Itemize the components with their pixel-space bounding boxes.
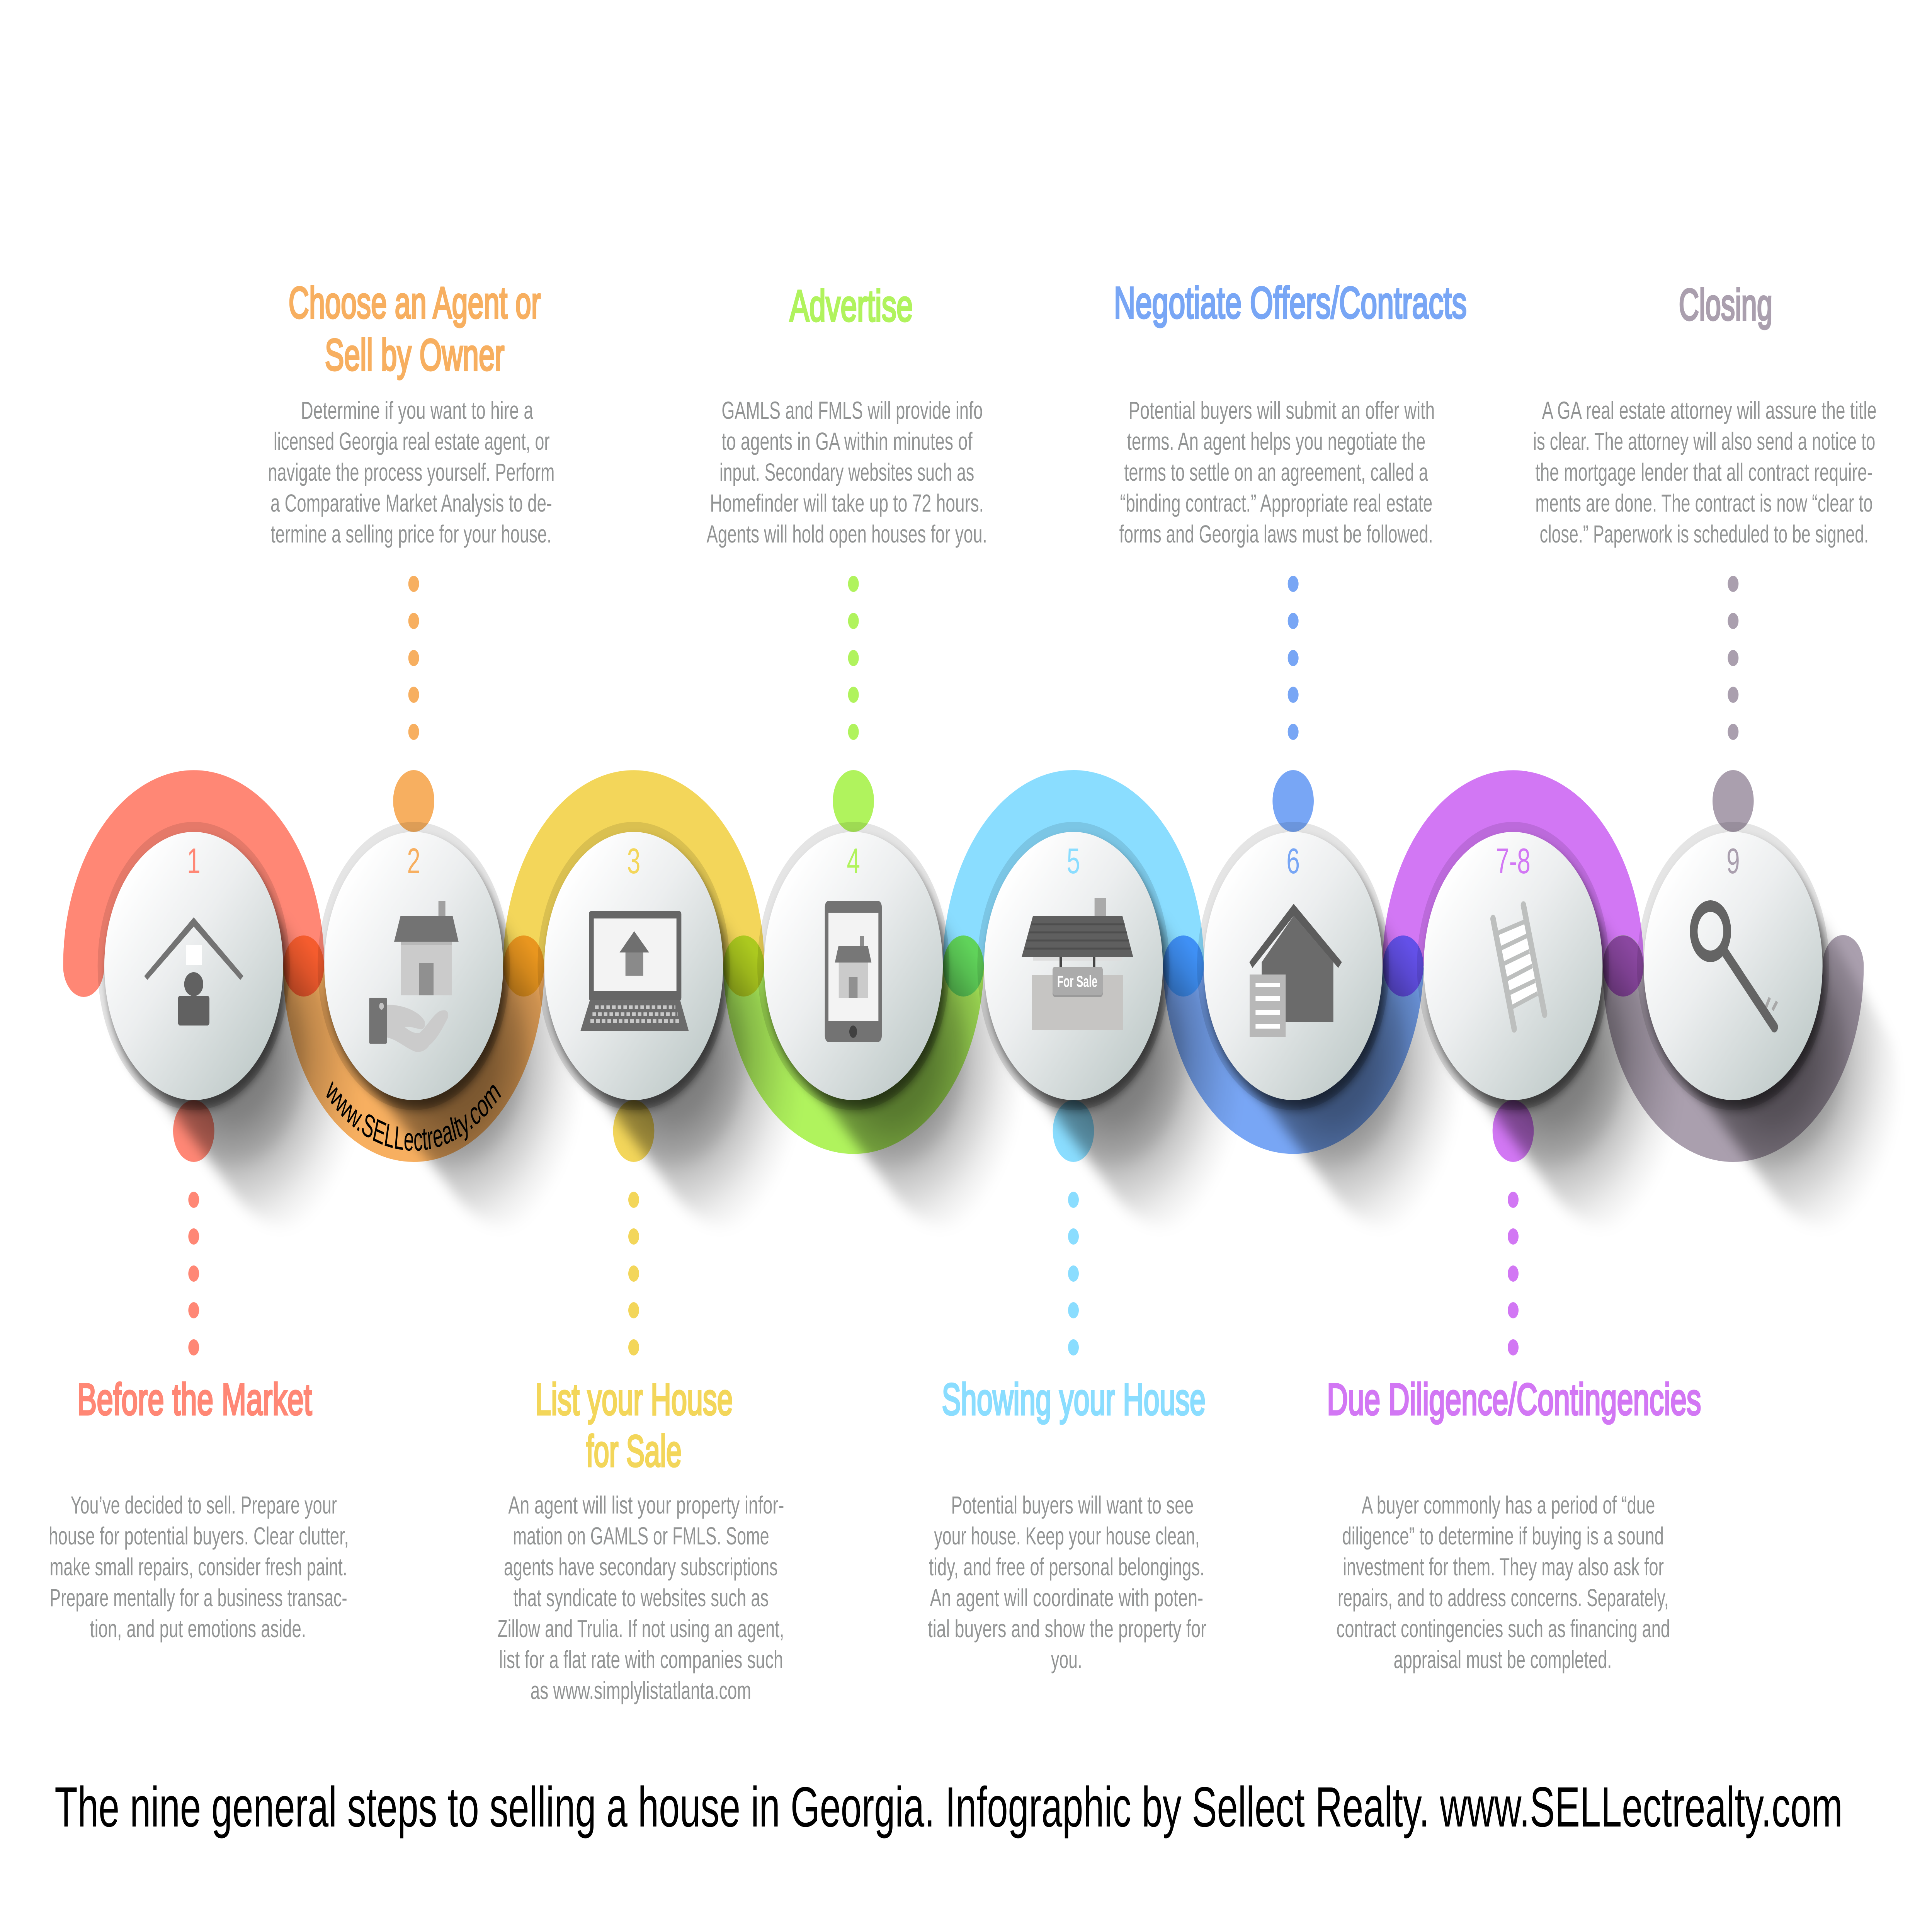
connector dots: step 3 (613, 1100, 654, 1355)
circle discs (104, 832, 1823, 1100)
connector dots: step 2 (393, 576, 434, 832)
body: step 6 (1119, 396, 1435, 548)
body: step 1: tion, and put emotions aside. (90, 1615, 306, 1643)
icon: ladder (1493, 905, 1544, 1029)
body: step 7-8 (1337, 1491, 1670, 1673)
band 1 (84, 801, 304, 966)
body: step 4: Homefinder will take up to 72 hours. (710, 489, 984, 517)
body: step 1: make small repairs, consider fresh paint. (50, 1553, 347, 1581)
contact shadows (107, 839, 1827, 1110)
body: step 3: agents have secondary subscriptions (504, 1553, 778, 1581)
heading: Showing your House: Showing your House (942, 1374, 1206, 1424)
panel: step 9 text (1533, 280, 1877, 548)
body: step 5 (928, 1491, 1206, 1673)
band 9 (1623, 966, 1843, 1131)
body: step 3: mation on GAMLS or FMLS. Some (513, 1522, 769, 1550)
body: step 7-8: A buyer commonly has a period of “due (1362, 1491, 1655, 1519)
body: step 2: licensed Georgia real estate agent, or (274, 427, 550, 455)
step numbers: 9 (1726, 840, 1740, 881)
body: step 5: tial buyers and show the property for (928, 1615, 1206, 1643)
body: step 5: Potential buyers will want to see (951, 1491, 1194, 1519)
heading: Negotiate Offers/Contracts: Negotiate Offers/Contracts (1114, 278, 1467, 328)
body: step 9: the mortgage lender that all contract require- (1535, 458, 1873, 486)
body: step 2 (268, 396, 554, 548)
body: step 2: Determine if you want to hire a (301, 396, 534, 424)
step numbers: 3 (627, 840, 640, 881)
body: step 3: list for a flat rate with companies such (499, 1646, 783, 1673)
curved website text: www.SELLectrealty.com (321, 1072, 505, 1158)
step numbers: 6 (1286, 840, 1300, 881)
step numbers: 5 (1067, 840, 1080, 881)
panel: step 6 text (1114, 278, 1467, 548)
body: step 2: a Comparative Market Analysis to de- (270, 489, 552, 517)
body: step 3: that syndicate to websites such as (514, 1584, 769, 1612)
heading: Choose an Agent or Sell by Owner: Choose an Agent or (289, 278, 541, 328)
heading: Choose an Agent or Sell by Owner: Sell by Owner (325, 330, 504, 380)
body: step 7-8: contract contingencies such as financing and (1337, 1615, 1670, 1643)
body: step 3: as www.simplylistatlanta.com (531, 1677, 751, 1704)
icon: house in hand (369, 901, 459, 1052)
body: step 5: tidy, and free of personal belongings. (929, 1553, 1204, 1581)
step numbers: 2 (407, 840, 420, 881)
body: step 6: “binding contract.” Appropriate real estate (1120, 489, 1432, 517)
body: step 1: You’ve decided to sell. Prepare your (71, 1491, 337, 1519)
panel: step 1 text (49, 1374, 349, 1643)
body: step 5: An agent will coordinate with poten- (930, 1584, 1203, 1612)
body: step 7-8: diligence” to determine if buying is a sound (1342, 1522, 1664, 1550)
body: step 9: ments are done. The contract is now “clear to (1535, 489, 1873, 517)
body: step 4: Agents will hold open houses for you. (707, 520, 987, 548)
panel: step 7-8 text (1327, 1374, 1701, 1673)
body: step 3: Zillow and Trulia. If not using an agent, (497, 1615, 784, 1643)
heading: Before the Market: Before the Market (77, 1374, 312, 1424)
body: step 3: An agent will list your property infor- (508, 1491, 784, 1519)
wave ribbon (84, 801, 1843, 1131)
body: step 9: is clear. The attorney will also send a notice to (1533, 427, 1875, 455)
heading: Closing: Closing (1679, 280, 1772, 330)
band 2 (304, 966, 524, 1131)
heading: Choose an Agent or Sell by Owner (289, 278, 541, 380)
body: step 2: termine a selling price for your house. (271, 520, 551, 548)
body: step 4: GAMLS and FMLS will provide info (721, 396, 983, 424)
icon: key (1694, 906, 1777, 1027)
connector dots: step 7-8 (1493, 1100, 1534, 1355)
heading: Advertise: Advertise (789, 281, 913, 331)
icon: for sale house: For Sale (1057, 972, 1097, 990)
body: step 3 (497, 1491, 784, 1704)
body: step 4 (707, 396, 987, 548)
body: step 6: terms to settle on an agreement, called a (1124, 458, 1429, 486)
connector dots: step 5 (1053, 1100, 1094, 1355)
heading: List your House for Sale: for Sale (586, 1426, 682, 1476)
junction dots (283, 935, 1643, 997)
icon: house and document (1249, 904, 1342, 1037)
connector dots: step 9 (1713, 576, 1754, 832)
panel: step 5 text (928, 1374, 1206, 1673)
body: step 7-8: repairs, and to address concerns. Separately, (1338, 1584, 1669, 1612)
body: step 1: house for potential buyers. Clear clutter, (49, 1522, 349, 1550)
body: step 6: forms and Georgia laws must be followed. (1119, 520, 1433, 548)
heading: List your House for Sale (535, 1374, 733, 1476)
heading: Due Diligence/Contingencies: Due Diligence/Contingencies (1327, 1374, 1701, 1424)
step numbers: 4 (847, 840, 860, 881)
body: step 1 (49, 1491, 349, 1643)
icon: phone (825, 901, 882, 1042)
long shadows (150, 920, 1898, 1225)
heading: List your House for Sale: List your House (535, 1374, 733, 1424)
icon: laptop (580, 911, 689, 1031)
band 3 (524, 801, 744, 966)
step numbers: 7-8 (1496, 840, 1531, 881)
band 6 (1184, 966, 1403, 1123)
body: step 5: you. (1051, 1646, 1082, 1673)
panel: step 3 text (497, 1374, 784, 1704)
band 5 (963, 801, 1184, 966)
band 4 (744, 966, 963, 1123)
connector dots: step 6 (1272, 576, 1314, 832)
body: step 2: navigate the process yourself. Perform (268, 458, 554, 486)
body: step 6: terms. An agent helps you negotiate the (1127, 427, 1425, 455)
body: step 7-8: investment for them. They may also ask for (1343, 1553, 1664, 1581)
circle halo rings (98, 822, 1829, 1110)
body: step 9: close.” Paperwork is scheduled to be signed. (1540, 520, 1869, 548)
connector dots: step 4 (833, 576, 874, 832)
icon: person under roof (144, 917, 243, 1026)
body: step 9: A GA real estate attorney will assure the title (1542, 396, 1877, 424)
body: step 1: Prepare mentally for a business transac- (50, 1584, 347, 1612)
body: step 7-8: appraisal must be completed. (1394, 1646, 1612, 1673)
body: step 6: Potential buyers will submit an offer with (1129, 396, 1435, 424)
panel: step 2 text (268, 278, 554, 548)
body: step 4: input. Secondary websites such as (719, 458, 974, 486)
band 7-8 (1403, 801, 1623, 966)
connector dots: step 1 (173, 1100, 214, 1355)
icon: for sale house (1022, 898, 1133, 1030)
body: step 5: your house. Keep your house clean, (934, 1522, 1200, 1550)
body: step 4: to agents in GA within minutes of (721, 427, 973, 455)
body: step 9 (1533, 396, 1877, 548)
footer caption: The nine general steps to selling a house in Georgia. Infographic by Sellect Realty. www.SELLectrealty.com (54, 1776, 1843, 1839)
step numbers: 1 (187, 840, 201, 881)
junction dot shading (283, 935, 1643, 997)
panel: step 4 text (707, 281, 987, 548)
step numbers (187, 840, 1740, 881)
